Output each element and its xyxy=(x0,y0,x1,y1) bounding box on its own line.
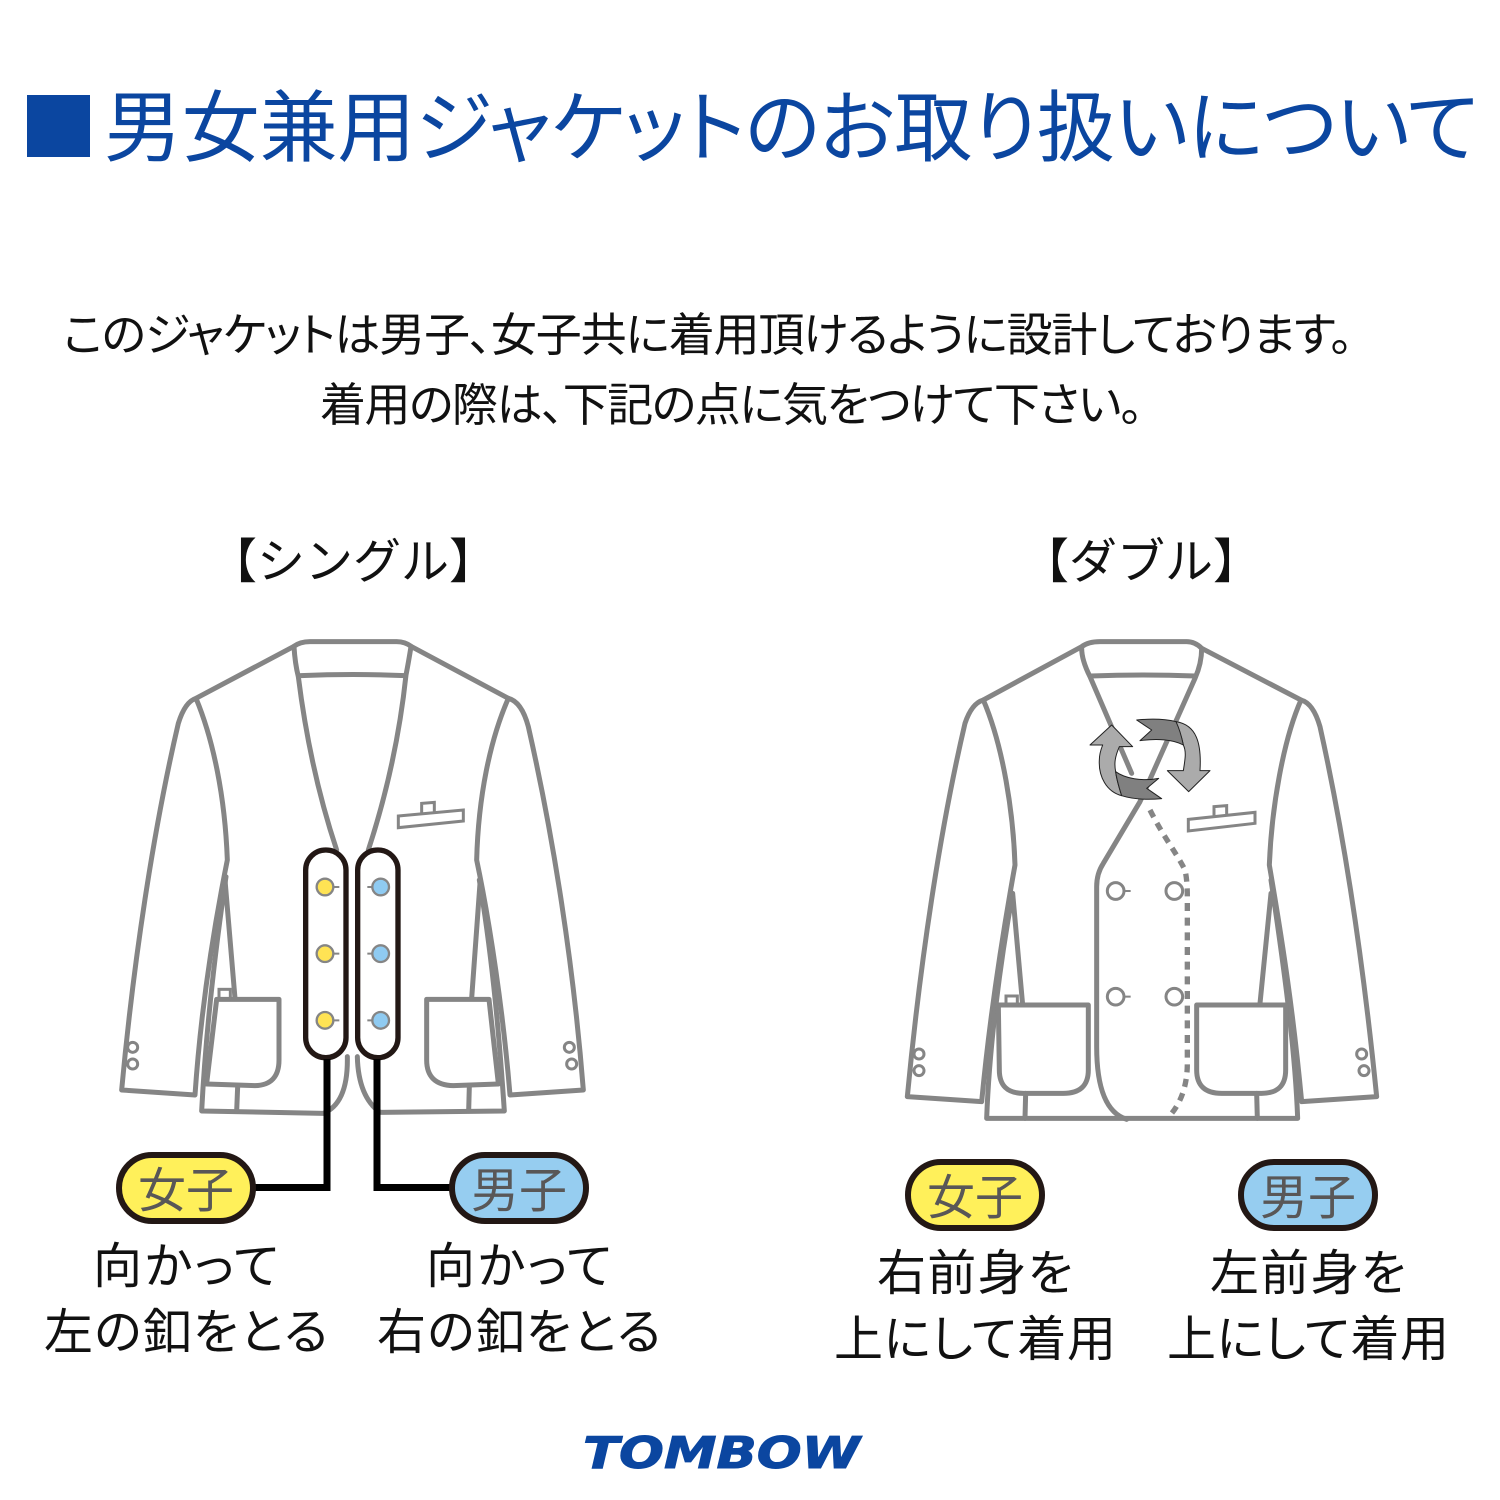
text: single male instructions: 向かって xyxy=(426,1240,612,1294)
tag: single male: 男子 xyxy=(471,1165,567,1218)
single jacket illustration xyxy=(122,642,583,1113)
dashed hidden front edge xyxy=(1150,810,1187,1117)
text: single male instructions: 右の釦をとる xyxy=(377,1306,661,1360)
tag: single female xyxy=(119,1155,253,1221)
buttons xyxy=(1107,883,1183,1005)
icon: title square xyxy=(27,95,90,157)
logo: TOMBOW xyxy=(583,1428,863,1479)
text: single female instructions: 向かって xyxy=(93,1240,279,1294)
text: double female instructions: 上にして着用 xyxy=(834,1313,1116,1367)
tag: double male: 男子 xyxy=(1260,1172,1356,1225)
text: double male instructions xyxy=(1167,1247,1449,1367)
leader line: male xyxy=(377,1059,452,1188)
title text: 男女兼用ジャケットのお取り扱いについて xyxy=(104,84,1479,172)
title xyxy=(27,84,1479,172)
text: double male instructions: 上にして着用 xyxy=(1167,1313,1449,1367)
heading: double: 【ダブル】 xyxy=(1021,536,1261,589)
tag: double female xyxy=(908,1162,1042,1228)
text: single female instructions: 左の釦をとる xyxy=(44,1306,328,1360)
highlight: left button band xyxy=(306,850,346,1058)
intro text xyxy=(63,309,1353,431)
text: double female instructions xyxy=(834,1247,1116,1367)
text: single female instructions xyxy=(44,1240,328,1360)
intro text: 着用の際は、下記の点に気をつけて下さい。 xyxy=(320,379,1143,431)
tag: single male xyxy=(452,1155,586,1221)
text: single male instructions xyxy=(377,1240,661,1360)
tag: double female: 女子 xyxy=(927,1172,1023,1225)
icon: swap arrows xyxy=(1090,719,1210,799)
text: double male instructions: 左前身を xyxy=(1210,1247,1406,1301)
intro text: このジャケットは男子、女子共に着用頂けるように設計しております。 xyxy=(63,309,1353,361)
text: double female instructions: 右前身を xyxy=(877,1247,1073,1301)
double jacket illustration xyxy=(907,642,1377,1119)
leader line: female xyxy=(252,1059,327,1188)
heading: single: 【シングル】 xyxy=(209,536,497,589)
highlight: right button band xyxy=(358,850,398,1058)
tag: double male xyxy=(1241,1162,1375,1228)
tag: single female: 女子 xyxy=(138,1165,234,1218)
